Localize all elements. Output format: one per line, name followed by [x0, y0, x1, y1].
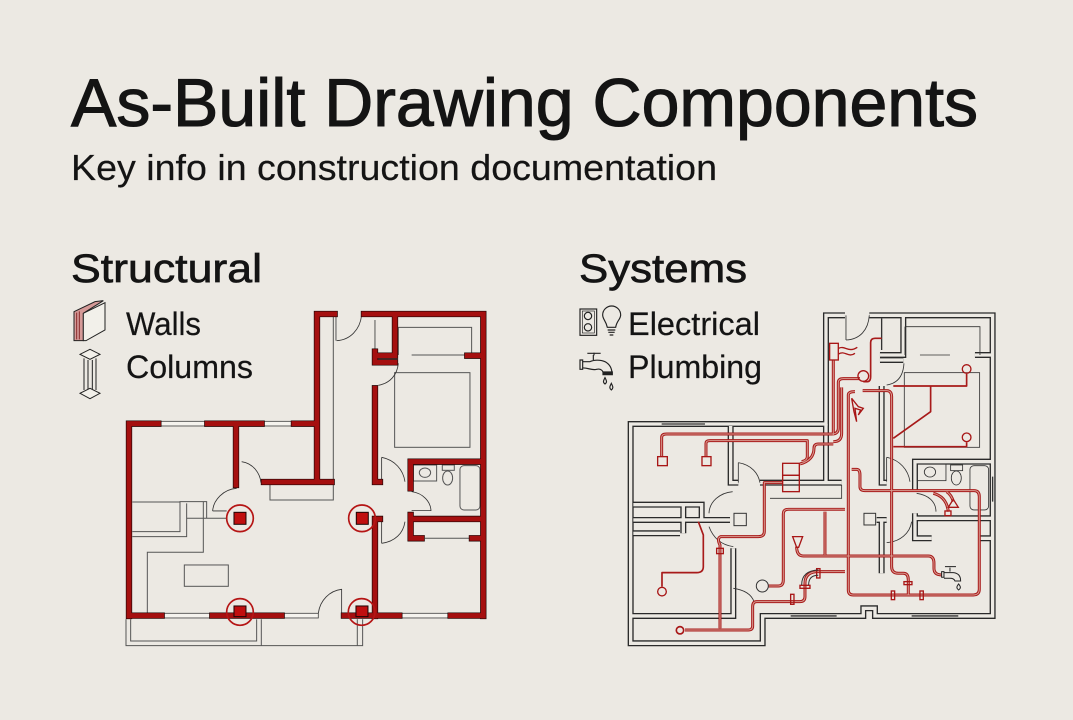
red conduit and pipe runs: [662, 338, 979, 630]
double-line walls: [631, 315, 993, 643]
door arcs and fixtures: [709, 315, 989, 602]
legend label: electrical: Electrical: [628, 306, 760, 342]
floor plan: structural: [126, 314, 485, 646]
floor plan: systems: [631, 315, 993, 643]
subtitle: Key info in construction documentation: [71, 147, 717, 188]
thin furniture and fixture lines: [126, 317, 485, 646]
legend label: columns: Columns: [126, 349, 253, 385]
column markers: [227, 505, 375, 625]
heading: structural: Structural: [71, 247, 262, 291]
legend label: plumbing: Plumbing: [628, 349, 762, 385]
icon: outlet and bulb: [580, 306, 621, 335]
single-line electrical circuits: [662, 338, 967, 587]
icon: wall: [74, 301, 105, 341]
electrical fixtures and boxes: [658, 343, 971, 634]
icon: column: [80, 349, 100, 399]
door arcs: [213, 315, 431, 615]
red walls: [129, 314, 483, 616]
heading: systems: Systems: [579, 247, 747, 291]
icon: faucet: [580, 353, 613, 390]
windows: [161, 421, 448, 618]
black pipe elbow and pump circle: [756, 570, 818, 592]
square columns: [734, 513, 876, 526]
title: As-Built Drawing Components: [71, 65, 978, 141]
faucet fixture in plan: [942, 567, 961, 590]
legend label: walls: Walls: [126, 306, 201, 342]
